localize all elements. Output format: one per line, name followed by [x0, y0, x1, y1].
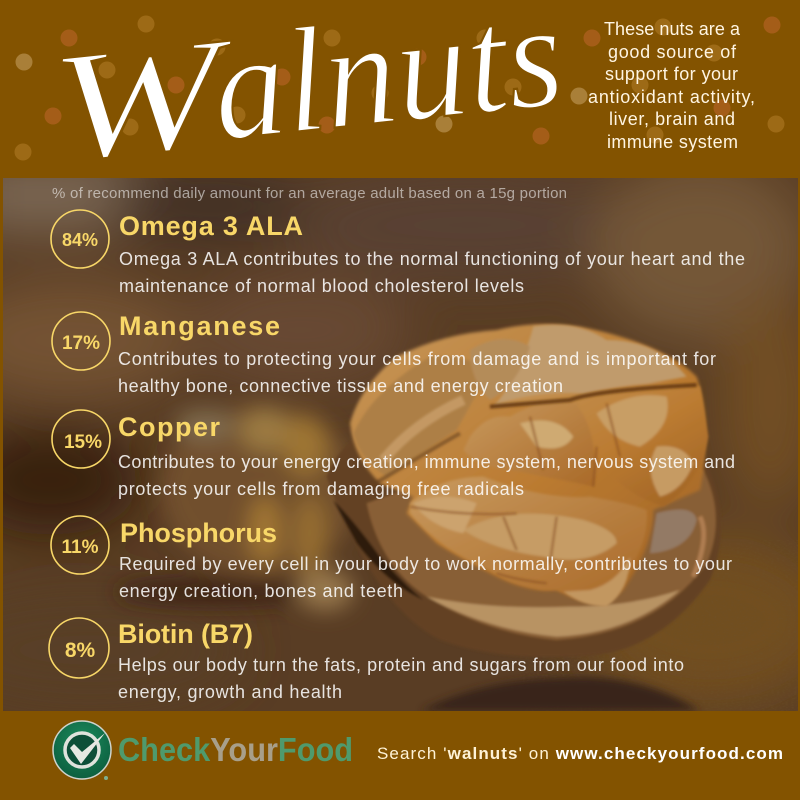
title	[44, 0, 571, 195]
dark overlay	[0, 178, 800, 711]
item: Omega 3 ALA: maintenance of normal blood cholesterol levels	[119, 276, 524, 296]
item: Manganese: healthy bone, connective tissue and energy creation	[118, 376, 563, 396]
item: Manganese: 17%	[62, 333, 100, 354]
item: Phosphorus	[51, 516, 732, 601]
item: Phosphorus: energy creation, bones and teeth	[119, 581, 403, 601]
item: Omega 3 ALA: Omega 3 ALA	[119, 211, 303, 241]
title: W	[44, 4, 246, 195]
item: Copper	[52, 410, 735, 499]
item: Omega 3 ALA: Omega 3 ALA contributes to the normal functioning of your heart and the	[119, 249, 745, 269]
intro text: antioxidant activity,	[588, 87, 755, 107]
background photo: walnut half	[0, 160, 800, 711]
intro text: These nuts are a	[604, 19, 741, 39]
shell	[326, 450, 718, 656]
blurred nut behind	[115, 405, 360, 610]
item: Manganese	[52, 311, 716, 396]
intro text	[588, 19, 755, 152]
item: Copper: Contributes to your energy creation, immune system, nervous system and	[118, 452, 735, 472]
item: Omega 3 ALA	[51, 210, 745, 296]
item: Biotin	[49, 618, 684, 702]
footer band	[0, 711, 800, 800]
item: Phosphorus: Required by every cell in your body to work normally, contributes to your	[119, 554, 732, 574]
item: Manganese: Contributes to protecting your cells from damage and is important for	[118, 349, 716, 369]
intro text: immune system	[607, 132, 738, 152]
item: Biotin: energy, growth and health	[118, 682, 342, 702]
item: Copper: protects your cells from damaging free radicals	[118, 479, 524, 499]
item: Biotin: Helps our body turn the fats, protein and sugars from our food into	[118, 655, 684, 675]
intro text: liver, brain and	[609, 109, 735, 129]
intro text: good source of	[608, 42, 737, 62]
logo wordmark: CheckYourFood	[118, 731, 353, 768]
intro text: support for your	[605, 64, 738, 84]
search call to action: Search 'walnuts' on www.checkyourfood.com	[377, 744, 783, 763]
icon: check logo	[53, 721, 111, 780]
header bokeh dots	[14, 16, 784, 160]
item: Copper: 15%	[64, 432, 102, 453]
caption: % of recommend daily amount for an average adult based on a 15g portion	[52, 185, 567, 202]
item: Phosphorus: 11%	[62, 537, 99, 558]
wood grain	[520, 540, 800, 711]
kernel	[350, 324, 706, 602]
item: Omega 3 ALA: 84%	[62, 230, 98, 250]
item: Copper: Copper	[118, 412, 220, 442]
item: Biotin: Biotin (B7)	[118, 619, 253, 649]
item: Phosphorus: Phosphorus	[120, 518, 277, 548]
item: Biotin: 8%	[65, 639, 95, 662]
item: Manganese: Manganese	[119, 311, 280, 341]
